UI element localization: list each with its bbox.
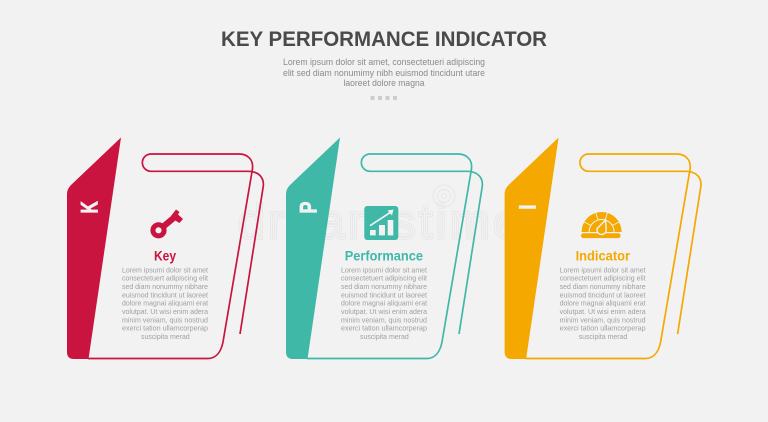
text: Key: consectetuert adipiscing elit bbox=[122, 274, 208, 283]
text: Key: dolore magnai aliquami erat bbox=[122, 299, 208, 308]
icon: gauge bbox=[581, 212, 622, 238]
letter P: P bbox=[296, 202, 323, 214]
text: Indicator: suscipita merad bbox=[579, 332, 627, 341]
title: KEY PERFORMANCE INDICATOR bbox=[221, 27, 547, 51]
heading: Performance: Performance bbox=[345, 248, 423, 264]
text: Performance: exerci tation ullamcorperap bbox=[341, 324, 427, 333]
text: Key: exerci tation ullamcorperap bbox=[122, 324, 208, 333]
text: Indicator: minim veniam, quis nostrud bbox=[560, 315, 646, 324]
text: Key: volutpat. Ut wisi enim adera bbox=[122, 307, 209, 316]
text: Key: suscipita merad bbox=[141, 332, 190, 341]
text: Performance: sed diam nonummy nibhare bbox=[341, 282, 427, 291]
panel: Key bbox=[67, 138, 263, 359]
text: Performance bbox=[341, 265, 428, 341]
subtitle: laoreet dolore magna bbox=[344, 78, 425, 89]
text: Indicator bbox=[560, 265, 646, 341]
tab: Indicator bbox=[505, 138, 559, 359]
panel: Performance bbox=[286, 138, 482, 359]
text: Indicator: euismod tincidunt ut laoreet bbox=[560, 290, 646, 299]
text: Indicator: dolore magnai aliquami erat bbox=[560, 299, 646, 308]
text: Performance: volutpat. Ut wisi enim adera bbox=[341, 307, 428, 316]
text: Key bbox=[122, 265, 209, 341]
pagination dots bbox=[370, 96, 397, 100]
text: Indicator: sed diam nonummy nibhare bbox=[560, 282, 646, 291]
subtitle: Lorem ipsum dolor sit amet, consectetueri adipiscing bbox=[283, 57, 485, 68]
panel: Indicator bbox=[505, 138, 701, 359]
text: Indicator: Lorem ipsumi dolor sit amet bbox=[560, 265, 646, 274]
text: Key: euismod tincidunt ut laoreet bbox=[122, 290, 208, 299]
text: Key: Lorem ipsumi dolor sit amet bbox=[122, 265, 208, 274]
text: Performance: euismod tincidunt ut laoreet bbox=[341, 290, 427, 299]
text: Indicator: exerci tation ullamcorperap bbox=[560, 324, 646, 333]
text: Performance: suscipita merad bbox=[360, 332, 409, 341]
watermark: dreamstime bbox=[238, 196, 520, 249]
text: Key: minim veniam, quis nostrud bbox=[122, 315, 208, 324]
text: Indicator: consectetuert adipiscing elit bbox=[560, 274, 646, 283]
watermark: dreamstime bbox=[238, 196, 520, 249]
icon: key bbox=[153, 210, 183, 236]
icon: growth chart bbox=[364, 206, 398, 240]
letter I bbox=[519, 205, 536, 209]
heading: Indicator: Indicator bbox=[576, 248, 631, 264]
outline: Indicator bbox=[526, 154, 701, 358]
tab: Key bbox=[67, 138, 121, 359]
subtitle bbox=[283, 57, 485, 89]
text: Performance: consectetuert adipiscing elit bbox=[341, 274, 427, 283]
text: Performance: minim veniam, quis nostrud bbox=[341, 315, 427, 324]
text: Key: sed diam nonummy nibhare bbox=[122, 282, 208, 291]
text: Performance: Lorem ipsumi dolor sit amet bbox=[341, 265, 427, 274]
outline: Key bbox=[88, 154, 263, 358]
outline: Performance bbox=[307, 154, 482, 358]
tab: Performance bbox=[286, 138, 340, 359]
text: Indicator: volutpat. Ut wisi enim adera bbox=[560, 307, 646, 316]
text: Performance: dolore magnai aliquami erat bbox=[341, 299, 427, 308]
heading: Key: Key bbox=[154, 248, 176, 264]
subtitle: elit sed diam nonumimy nibh euismod tincidunt utare bbox=[283, 68, 485, 79]
letter K: K bbox=[77, 201, 104, 214]
